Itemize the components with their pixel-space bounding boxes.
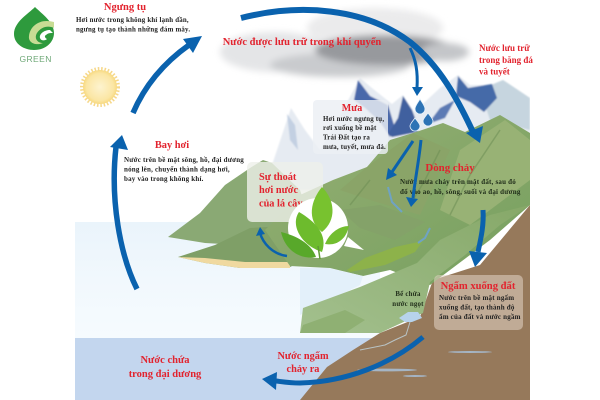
logo: Green (14, 7, 54, 64)
heading: Nước chứa trong đại dương: trong đại dương (129, 369, 202, 380)
heading: Nước lưu trữ trong băng đá và tuyết: trong băng đá (479, 55, 533, 65)
heading: Bay hơi: Bay hơi (155, 140, 189, 151)
icon: sun (82, 69, 118, 105)
lower green slope (300, 205, 530, 333)
arrow: groundwater outflow (262, 337, 423, 390)
heading: Sự thoát hơi nước của lá cây: của lá cây (259, 198, 303, 210)
panel: transpiration (247, 162, 323, 222)
panel: infiltration (434, 275, 523, 330)
arrow: runoff down (406, 140, 421, 207)
text: rain: rơi xuống bề mặt (323, 125, 377, 132)
arrow: ocean to evaporation (110, 135, 137, 289)
text: infiltration: Nước trên bề mặt ngấm (439, 294, 514, 302)
ocean (75, 338, 380, 400)
heading: Nước chứa trong đại dương: Nước chứa (140, 355, 190, 366)
arrow: infiltration down (469, 210, 487, 267)
icon: leaves (281, 187, 364, 259)
lake (300, 268, 363, 315)
text: runoff: đổ vào ao, hồ, sông, suối và đại dương (400, 188, 521, 196)
heading: Sự thoát hơi nước của lá cây: hơi nước (259, 185, 298, 196)
text: infiltration: ẩm của đất và nước ngầm (439, 313, 521, 321)
heading: Dòng chảy: Dòng chảy (425, 162, 475, 174)
heading: Nước ngấm chảy ra: Nước ngấm (277, 351, 329, 362)
label: Bể chứa nước ngọt: Bể chứa (395, 291, 421, 298)
arrow: transpiration (256, 227, 287, 256)
heading: Ngấm xuống đất: Ngấm xuống đất (441, 281, 516, 292)
logo text: GREEN (20, 54, 52, 64)
heading: Nước lưu trữ trong băng đá và tuyết: và tuyết (479, 66, 510, 76)
illustration: sea, mountains and ground (75, 75, 530, 400)
arrow: evaporation to condensation (133, 36, 202, 113)
snowy mountains (272, 75, 530, 190)
sky over sea (75, 222, 380, 338)
heading: Sự thoát hơi nước của lá cây: Sự thoát (259, 172, 296, 183)
text: rain: mưa, tuyết, mưa đá. (323, 144, 386, 151)
arrow: atmosphere to mountains (241, 10, 483, 143)
heading: Nước ngấm chảy ra: chảy ra (287, 364, 319, 375)
text: condensation: ngưng tụ tạo thành những đám mây. (76, 26, 190, 34)
text: condensation: Hơi nước trong không khí lạnh dần, (76, 17, 189, 24)
heading: Mưa: Mưa (342, 103, 362, 114)
text: runoff: Nước mưa chảy trên mặt đất, sau đó (400, 178, 516, 186)
heading: Ngưng tụ: Ngưng tụ (104, 2, 146, 13)
text: evaporation: bay vào trong không khí. (124, 175, 204, 183)
label: Bể chứa nước ngọt: nước ngọt (392, 301, 424, 308)
left island hills (168, 160, 302, 268)
heading: Nước lưu trữ trong băng đá và tuyết: Nước lưu trữ (479, 43, 530, 53)
green mountains (265, 115, 530, 285)
arrow: cloud to rain (410, 48, 423, 96)
text: evaporation: Nước trên bề mặt sông, hồ, đại dương (124, 156, 244, 164)
underground water patches (357, 351, 492, 377)
heading: Nước được lưu trữ trong khí quyển: Nước được lưu trữ trong khí quyển (223, 37, 381, 48)
text: evaporation: nóng lên, chuyển thành dạng hơi, (124, 166, 230, 174)
ground (300, 205, 530, 400)
freshwater pool (360, 312, 422, 350)
panel: rain (313, 100, 388, 154)
text: rain: Hơi nước ngưng tụ, (323, 116, 384, 123)
text: rain: Trái Đất tạo ra (323, 134, 370, 141)
text: infiltration: xuống đất, tạo thành độ (439, 304, 515, 312)
cloud (220, 8, 469, 77)
arrow: runoff left (386, 141, 413, 180)
icon: rain drops (410, 99, 433, 131)
